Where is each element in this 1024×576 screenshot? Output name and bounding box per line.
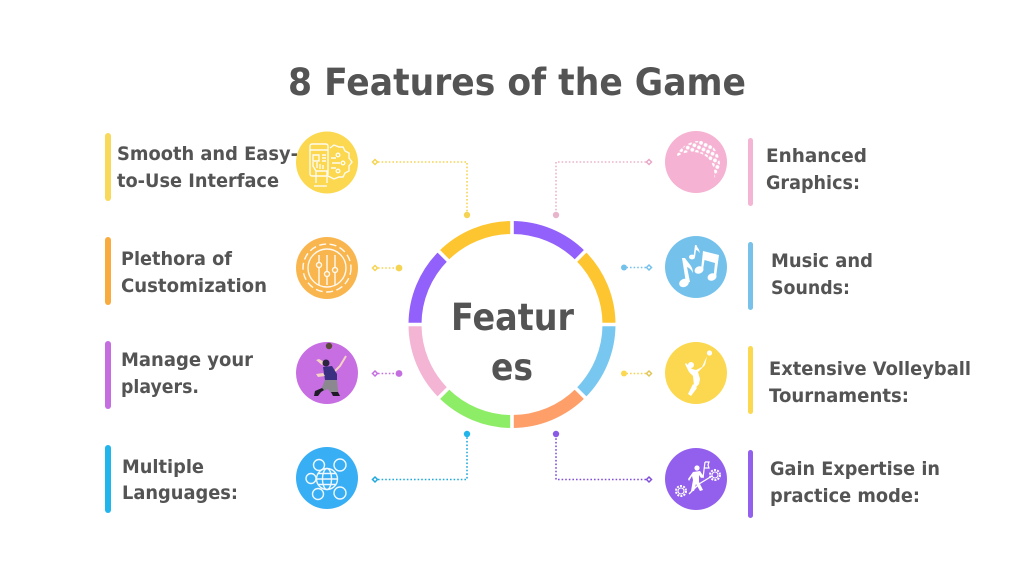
feature label: Smooth and Easy-	[117, 143, 298, 165]
accent bar	[748, 138, 753, 206]
panel: smooth and easy-to-use interface	[105, 132, 470, 218]
panel: extensive volleyball tournaments	[621, 342, 971, 414]
accent bar	[748, 242, 753, 310]
feature label: Graphics:	[766, 172, 860, 194]
feature label: Manage your	[121, 349, 254, 371]
panel: gain expertise in practice mode	[553, 431, 940, 518]
connector	[553, 160, 652, 218]
feature label: Extensive Volleyball	[769, 358, 971, 380]
feature label: players.	[121, 376, 199, 398]
icon: hand on touchscreen	[296, 132, 358, 194]
connector	[621, 264, 652, 270]
feature label	[121, 248, 267, 297]
panel: music and sounds	[621, 236, 873, 310]
accent bar	[105, 445, 111, 513]
feature label: Music and	[771, 250, 873, 272]
icon: volleyball player jumping	[296, 342, 358, 404]
connector	[372, 431, 470, 482]
icon: dotted sphere	[665, 131, 727, 193]
center label: es	[491, 346, 533, 389]
feature label	[121, 349, 254, 398]
accent bar	[105, 341, 111, 409]
feature label: Plethora of	[121, 248, 233, 270]
icon: gear with sliders	[296, 237, 358, 299]
accent bar	[105, 133, 111, 201]
panel: multiple languages	[105, 431, 470, 513]
icon: music notes	[665, 236, 727, 298]
feature label: Sounds:	[771, 277, 850, 299]
feature label: Multiple	[122, 456, 204, 478]
connector	[621, 370, 652, 376]
title: 8 Features of the Game	[288, 60, 746, 104]
feature label	[770, 458, 940, 507]
center label: Featur	[451, 296, 575, 339]
connector	[372, 160, 470, 218]
feature label: to-Use Interface	[117, 170, 279, 192]
panel: plethora of customization	[105, 237, 402, 305]
feature label	[771, 250, 873, 299]
connector	[372, 370, 402, 377]
feature label	[117, 143, 298, 192]
icon: globe with language bubbles	[296, 447, 358, 509]
accent bar	[748, 450, 753, 518]
panel: enhanced graphics	[553, 131, 867, 218]
feature label: Tournaments:	[769, 385, 909, 407]
accent bar	[748, 346, 753, 414]
feature label: Customization	[121, 275, 267, 297]
icon: climber with flag and gears	[665, 448, 727, 510]
panel: manage your players	[105, 341, 402, 409]
connector	[372, 265, 402, 271]
feature label	[122, 456, 238, 504]
feature label: practice mode:	[770, 485, 920, 507]
feature label: Enhanced	[766, 145, 867, 167]
connector	[553, 431, 652, 482]
central ring diagram	[402, 215, 622, 434]
feature label: Gain Expertise in	[770, 458, 940, 480]
feature label: Languages:	[122, 482, 238, 504]
center label	[451, 296, 575, 389]
feature label	[769, 358, 971, 407]
icon: volleyball spike silhouette	[665, 342, 727, 404]
accent bar	[105, 237, 111, 305]
feature label	[766, 145, 867, 194]
